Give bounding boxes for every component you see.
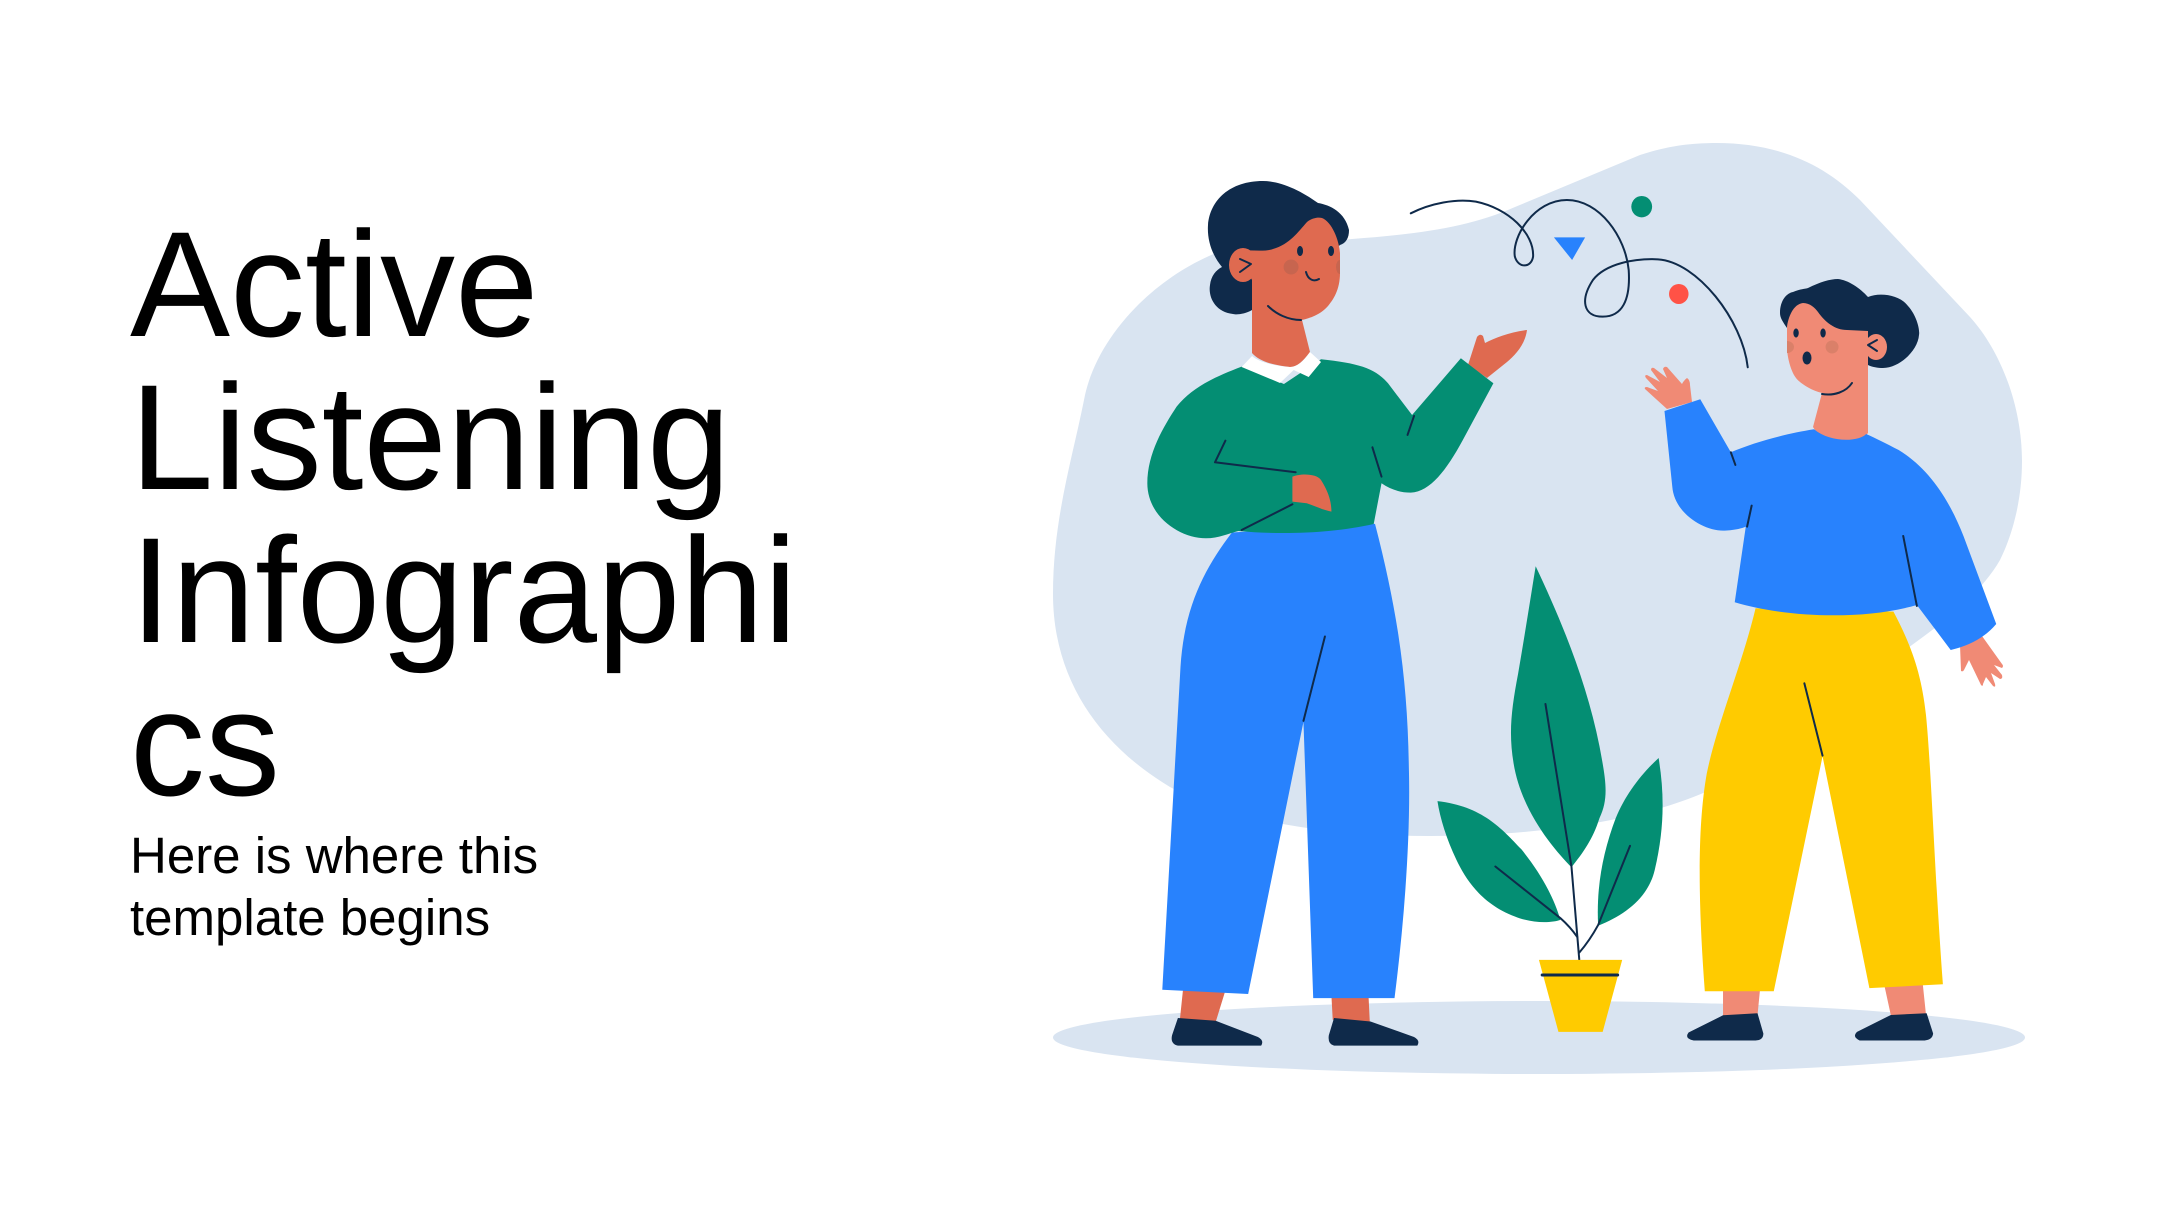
man ear mark [1868, 340, 1877, 351]
subtitle: template begins [130, 889, 490, 946]
man waving hand [1645, 367, 1692, 409]
plant leaves [1437, 566, 1663, 926]
woman ear mark [1240, 259, 1251, 272]
woman legs [1162, 524, 1418, 1046]
man hair [1780, 279, 1919, 368]
man lower hand [1960, 636, 2003, 687]
man eyes [1793, 328, 1826, 337]
woman nose [1306, 272, 1319, 280]
flower pot [1539, 960, 1622, 1032]
woman trouser crease [1303, 636, 1325, 721]
woman raised hand [1468, 330, 1527, 378]
man sweater group [1664, 399, 1996, 650]
conversation squiggle [1411, 200, 1748, 367]
woman sweater group [1147, 352, 1493, 538]
woman smile [1268, 306, 1301, 320]
potted plant [1437, 566, 1663, 1032]
woman white collar [1242, 352, 1321, 383]
man trouser crease [1804, 683, 1823, 756]
woman eyes [1297, 246, 1334, 256]
title: Active [130, 200, 538, 368]
man shoes [1687, 1013, 1933, 1040]
woman resting hand [1292, 474, 1331, 512]
man ankles [1723, 984, 1926, 1017]
subtitle: Here is where this [130, 827, 538, 884]
upper illustration: clothing and conversation [1147, 196, 1996, 650]
title: cs [130, 659, 280, 827]
woman trousers [1162, 524, 1409, 998]
man trousers [1700, 608, 1943, 991]
ground shadow ellipse [1053, 1001, 2025, 1074]
man blush [1787, 340, 1839, 353]
woman blush [1284, 260, 1340, 274]
woman sweater fold lines [1215, 416, 1414, 530]
title: Infographi [130, 506, 797, 674]
blue triangle [1554, 237, 1585, 260]
man smile [1822, 383, 1852, 395]
woman ankles [1180, 989, 1370, 1022]
plant stems [1495, 704, 1630, 960]
man open mouth [1802, 352, 1812, 364]
lower illustration: plant and legs [1162, 524, 1943, 1046]
woman head [1208, 181, 1527, 378]
green dot [1631, 196, 1652, 217]
illustration background blob [1053, 143, 2022, 836]
woman shoes [1172, 1018, 1418, 1046]
man head [1645, 279, 2003, 687]
man blue sweater [1664, 399, 1996, 650]
man face and neck [1787, 303, 1868, 442]
woman face and neck [1237, 218, 1340, 367]
man ear [1865, 334, 1887, 360]
woman hair [1208, 181, 1349, 314]
man legs [1687, 608, 1943, 1040]
man sweater fold lines [1731, 452, 1917, 606]
red dot [1669, 284, 1689, 304]
woman ear [1229, 248, 1257, 282]
title: Listening [130, 353, 730, 521]
woman green sweater [1147, 358, 1493, 538]
